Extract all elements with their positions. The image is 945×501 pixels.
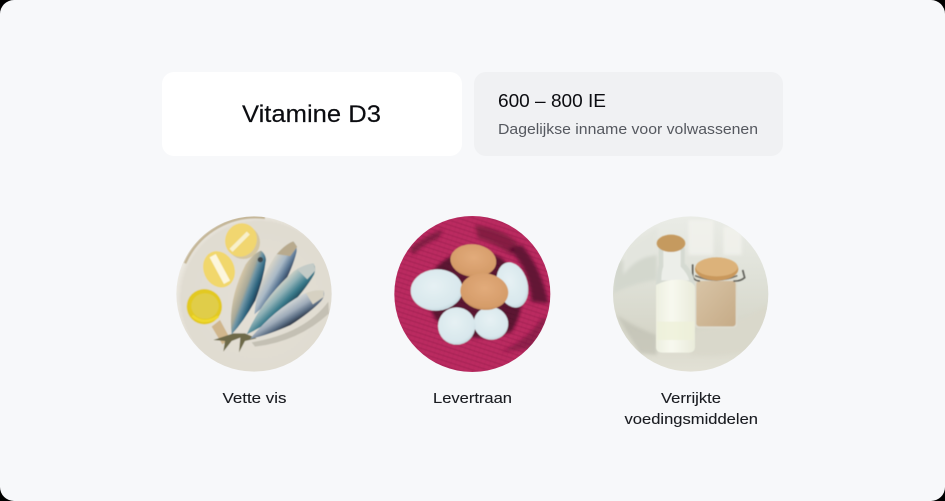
eggs [496,262,530,308]
intake description: Dagelijkse inname voor volwassenen [498,121,758,138]
label: Levertraan: Levertraan [433,390,512,407]
label: Verrijkte voedingsmiddelen: Verrijkte [661,390,721,407]
fish 1 [230,250,267,334]
label: Verrijkte voedingsmiddelen: voedingsmiddelen [624,411,758,428]
oil [187,289,222,324]
lemon halves [224,222,258,258]
bottle [658,248,695,283]
panel: daily intake [474,72,783,156]
photo: plate with oily fish [176,216,332,372]
fish 2 [254,241,298,314]
panel: title card [162,72,462,156]
fish 4 [250,290,324,340]
fish 3 [246,263,316,335]
tails [213,333,257,352]
heading: Vitamine D3: Vitamine D3 [242,101,381,128]
label: Vette vis: Vette vis [222,390,286,407]
spoon handle [212,320,230,344]
jar [695,273,737,328]
photo: eggs in pink cloth [394,216,550,372]
intake amount: 600 – 800 IE [498,91,606,111]
photo: milk bottle and grain jar [613,216,768,372]
label: Verrijkte voedingsmiddelen [624,390,758,428]
fish shadows [252,302,329,347]
